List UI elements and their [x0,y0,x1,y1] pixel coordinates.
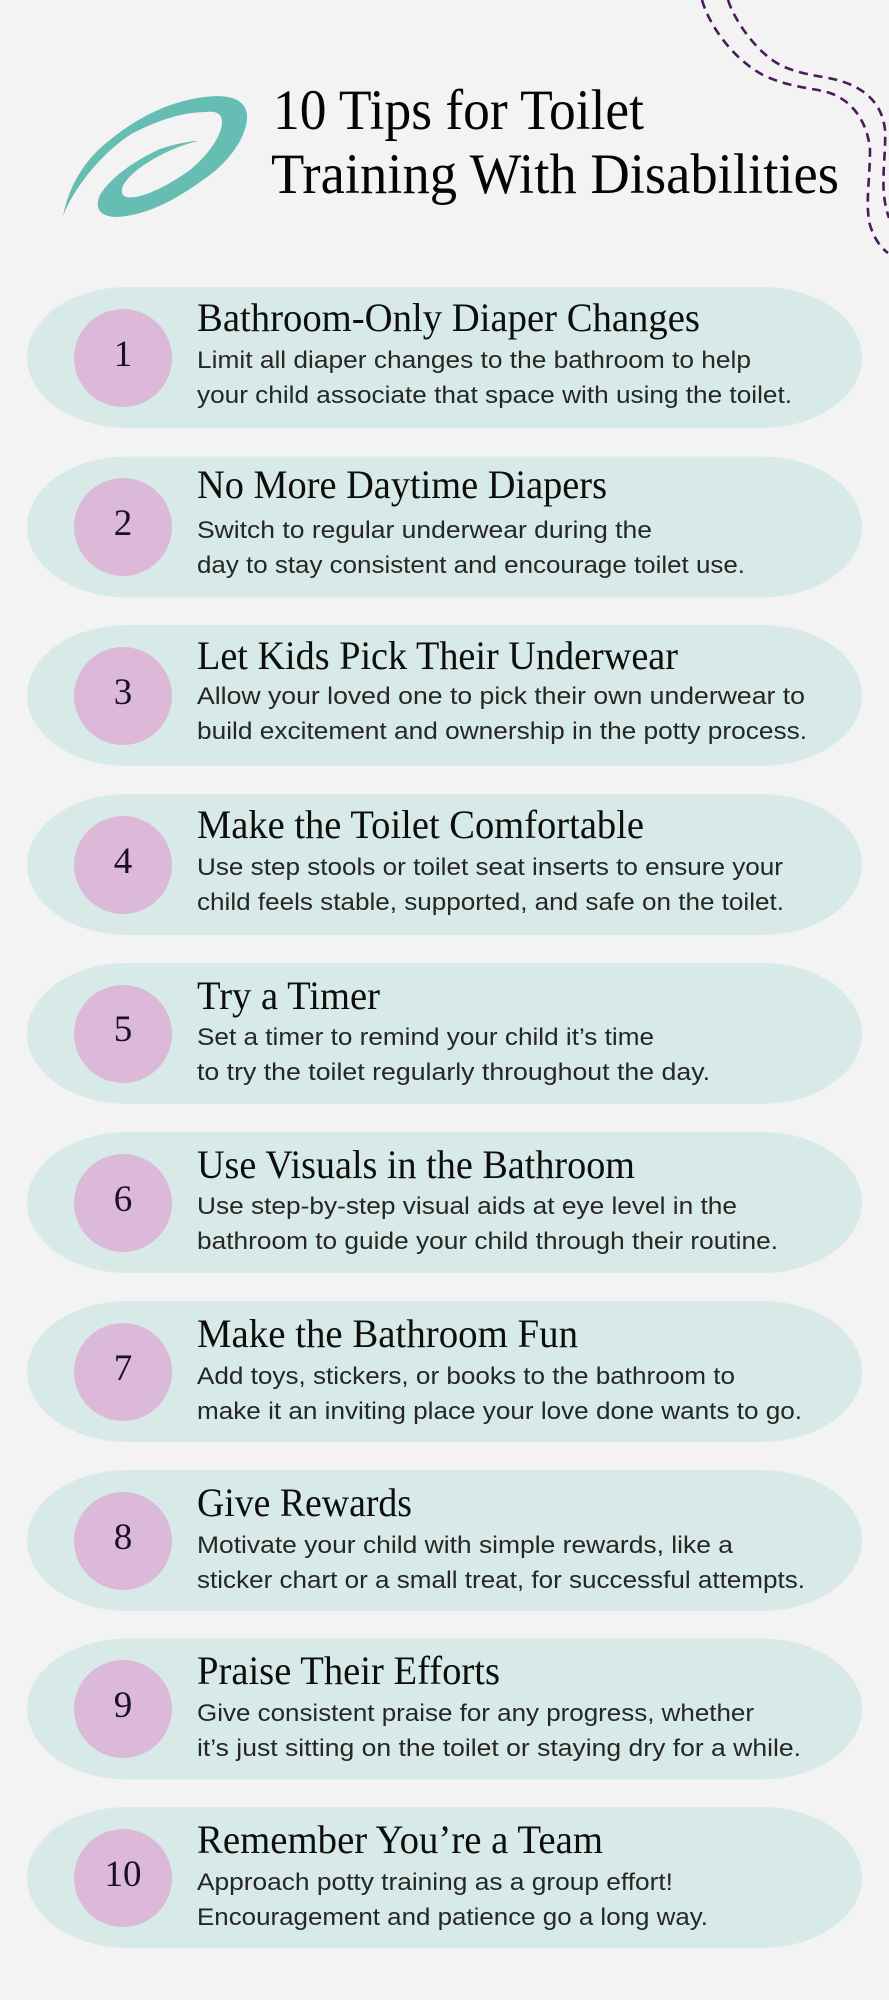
panel: tip 2 [27,456,862,598]
number badge 4: 4 [114,841,132,882]
heading 3: Let Kids Pick Their Underwear [197,633,678,678]
text block 3: Allow your loved one to pick their own underwear to [197,683,805,710]
number badge 3 [74,647,172,745]
heading 4: Make the Toilet Comfortable [197,802,644,847]
title: 10 Tips for Toilet [273,79,644,142]
text block 4 [197,854,784,916]
text block 1: Limit all diaper changes to the bathroom to help [197,347,751,374]
text block 5: to try the toilet regularly throughout the day. [197,1059,710,1086]
heading 9: Praise Their Efforts [197,1648,500,1693]
number badge 1 [74,309,172,407]
panel: tip 8 [27,1470,862,1611]
text block 3: build excitement and ownership in the potty process. [197,718,807,745]
panel: tip 6 [27,1132,862,1273]
text block 2 [197,517,745,579]
text block 4: child feels stable, supported, and safe on the toilet. [197,889,784,916]
panel: tip 10 [27,1807,862,1948]
panel: tip 5 [27,963,862,1104]
panel: tip 3 [27,625,862,766]
text block 8: sticker chart or a small treat, for successful attempts. [197,1567,805,1594]
text block 6: bathroom to guide your child through their routine. [197,1228,778,1255]
text block 5: Set a timer to remind your child it’s time [197,1024,654,1051]
text block 4: Use step stools or toilet seat inserts to ensure your [197,854,783,881]
text block 10: Approach potty training as a group effort! [197,1869,673,1896]
title: Training With Disabilities [271,143,839,206]
text block 9: Give consistent praise for any progress, whether [197,1700,754,1727]
text block 6 [197,1193,778,1255]
text block 9 [197,1700,801,1762]
number badge 5 [74,985,172,1083]
title [271,79,839,206]
text block 10: Encouragement and patience go a long way. [197,1904,708,1931]
number badge 9: 9 [114,1685,132,1726]
text block 9: it’s just sitting on the toilet or staying dry for a while. [197,1735,801,1762]
panel: tip 1 [27,287,862,428]
text block 7: make it an inviting place your love done wants to go. [197,1398,802,1425]
number badge 7: 7 [114,1348,132,1389]
text block 5 [197,1024,710,1086]
heading 1: Bathroom-Only Diaper Changes [197,295,700,340]
number badge 6: 6 [114,1179,132,1220]
text block 1: your child associate that space with using the toilet. [197,382,792,409]
text block 8: Motivate your child with simple rewards, like a [197,1532,733,1559]
decorative dashed curves [702,0,889,253]
heading 10: Remember You’re a Team [197,1817,603,1862]
number badge 10 [74,1829,172,1927]
text block 7: Add toys, stickers, or books to the bathroom to [197,1363,735,1390]
number badge 9 [74,1660,172,1758]
number badge 2 [74,478,172,576]
number badge 2: 2 [114,503,132,544]
number badge 3: 3 [114,672,132,713]
heading 8: Give Rewards [197,1480,412,1525]
number badge 8: 8 [114,1517,132,1558]
text block 10 [197,1869,708,1931]
text block 8 [197,1532,805,1594]
number badge 8 [74,1492,172,1590]
heading 2: No More Daytime Diapers [197,462,607,507]
number badge 6 [74,1154,172,1252]
number badge 5: 5 [114,1009,132,1050]
text block 6: Use step-by-step visual aids at eye level in the [197,1193,737,1220]
text block 3 [197,683,807,745]
panel: tip 9 [27,1638,862,1780]
text block 7 [197,1363,802,1425]
panel: tip 4 [27,794,862,935]
text block 2: day to stay consistent and encourage toilet use. [197,552,745,579]
number badge 4 [74,816,172,914]
heading 5: Try a Timer [197,973,380,1018]
number badge 1: 1 [114,334,132,375]
number badge 10: 10 [104,1854,142,1895]
icon: teal swoosh logo [63,96,247,217]
heading 7: Make the Bathroom Fun [197,1311,578,1356]
text block 2: Switch to regular underwear during the [197,517,652,544]
panel: tip 7 [27,1301,862,1442]
number badge 7 [74,1323,172,1421]
heading 6: Use Visuals in the Bathroom [197,1142,635,1187]
text block 1 [197,347,792,409]
